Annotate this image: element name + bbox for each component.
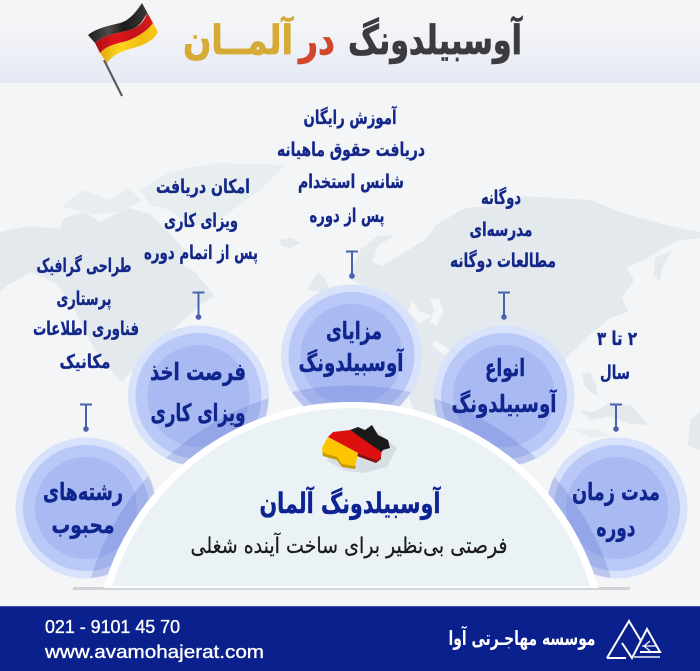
connector: duration: [610, 404, 622, 432]
text block: popular fields list: [33, 254, 139, 373]
text block: advantages list: شانس استخدام: [298, 171, 404, 193]
circle label: advantages: مزایای: [326, 317, 382, 345]
circle label: types: انواع: [485, 354, 525, 382]
floor shadow: [73, 587, 630, 590]
circle label: types: آوسبیلدونگ: [452, 389, 557, 418]
circle label: types: [452, 354, 557, 418]
connector: types: [498, 292, 510, 320]
text block: work visa list: امکان دریافت: [156, 176, 250, 198]
text block: types list: [450, 186, 556, 272]
circle: popular fields: [16, 438, 156, 578]
website: www.avamohajerat.com: [44, 642, 264, 662]
brand name: موسسه مهاجـرتی آوا: [448, 625, 596, 650]
connector: work visa: [192, 292, 204, 320]
text block: work visa list: پس از اتمام دوره: [144, 242, 258, 264]
text block: popular fields list: طراحی گرافیک: [36, 254, 132, 277]
circle label: duration: مدت زمان: [572, 478, 660, 506]
circle label: duration: [572, 478, 660, 542]
dome shadow on circles: [88, 385, 614, 588]
panel: central dome: [104, 402, 598, 588]
dome subheading: فرصتی بی‌نظیر برای ساخت آینده شغلی: [190, 532, 508, 559]
title: آوسبیلدونگ: [348, 15, 523, 64]
world map: [0, 163, 700, 450]
circle label: advantages: آوسبیلدونگ: [298, 348, 404, 377]
dome heading: آوسبیلدونگ آلمان: [260, 486, 442, 520]
circle label: work visa: فرصت اخذ: [150, 358, 246, 386]
text block: advantages list: آموزش رایگان: [304, 105, 397, 129]
text block: advantages list: [277, 105, 425, 227]
circle label: advantages: [298, 317, 404, 377]
text block: work visa list: ویزای کاری: [164, 210, 238, 232]
circle: work visa: [128, 326, 269, 466]
title: در: [297, 18, 335, 64]
title: [183, 15, 523, 64]
phone number: 021 - 9101 45 70: [45, 617, 180, 637]
text block: popular fields list: فناوری اطلاعات: [33, 318, 139, 340]
circle: types: [434, 326, 574, 466]
text block: types list: مدرسه‌ای: [470, 219, 532, 241]
text block: types list: دوگانه: [481, 186, 521, 209]
header band: [0, 0, 700, 83]
circle label: work visa: ویزای کاری: [150, 399, 246, 427]
text block: advantages list: پس از دوره: [310, 205, 384, 227]
icon: logo: [607, 621, 660, 658]
circle: duration: [546, 438, 688, 578]
connector: popular fields: [80, 404, 92, 432]
text block: work visa list: [144, 176, 258, 264]
title: آلمــان: [183, 15, 294, 64]
circle label: popular fields: رشته‌های: [43, 478, 123, 506]
circle label: popular fields: [43, 478, 123, 539]
text block: popular fields list: پرستاری: [56, 288, 112, 310]
text block: duration: [597, 328, 637, 384]
text block: popular fields list: مکانیک: [60, 351, 110, 373]
connector: advantages: [346, 252, 358, 279]
text block: advantages list: دریافت حقوق ماهیانه: [277, 139, 425, 161]
circle label: work visa: [150, 358, 246, 427]
text block: types list: مطالعات دوگانه: [450, 249, 556, 272]
circle label: duration: دوره: [596, 514, 636, 542]
icon: Germany map: [322, 425, 397, 473]
text block: duration: ۲ تا ۳: [597, 328, 637, 350]
footer: [0, 606, 700, 671]
circle: advantages: [281, 284, 422, 426]
text block: duration: سال: [600, 362, 630, 384]
circle label: popular fields: محبوب: [52, 511, 114, 539]
icon: German flag: [88, 3, 158, 96]
